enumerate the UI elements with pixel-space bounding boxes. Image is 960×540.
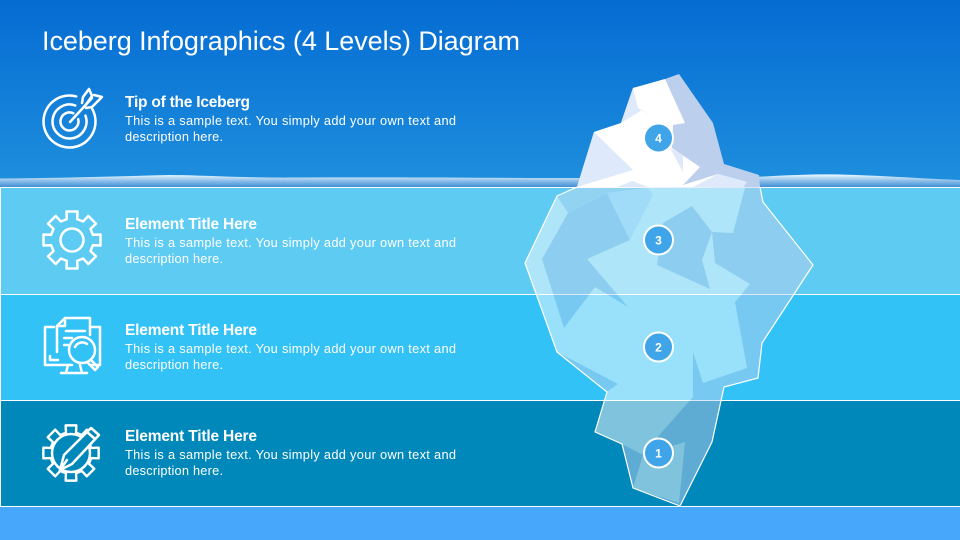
band: level 3 xyxy=(0,188,960,294)
iceberg underwater body xyxy=(525,187,813,506)
text: level 2: This is a sample text. You simply add your own text and xyxy=(125,341,456,356)
number badge 4 xyxy=(644,124,673,152)
icon: target with arrow xyxy=(43,89,102,148)
text: tip of the iceberg: This is a sample text. You simply add your own text and xyxy=(125,113,456,128)
band: level 2 xyxy=(0,294,960,400)
sky background xyxy=(0,0,960,188)
icon: monitor with document and magnifier xyxy=(45,318,100,373)
number badge 2: 2 xyxy=(655,340,662,354)
iceberg tip xyxy=(577,74,760,187)
text: level 1: Element Title Here xyxy=(125,428,257,445)
text: tip of the iceberg: Tip of the Iceberg xyxy=(125,94,250,111)
iceberg diagram xyxy=(525,74,813,506)
text: level 2: Element Title Here xyxy=(125,322,257,339)
text: level 1 xyxy=(125,428,456,478)
number badge 4: 4 xyxy=(655,132,662,146)
title: Iceberg Infographics (4 Levels) Diagram xyxy=(42,26,520,56)
icon: gear with pencil xyxy=(43,425,99,481)
bottom strip xyxy=(0,506,960,540)
number badge 2 xyxy=(644,332,673,362)
icon: gear xyxy=(44,212,100,268)
text: level 1: description here. xyxy=(125,463,223,478)
text: tip of the iceberg xyxy=(125,94,456,144)
text: tip of the iceberg: description here. xyxy=(125,129,223,144)
text: level 3 xyxy=(125,216,456,266)
number badge 1: 1 xyxy=(655,446,662,460)
text: level 3: This is a sample text. You simply add your own text and xyxy=(125,235,456,250)
text: level 2: description here. xyxy=(125,357,223,372)
number badge 1 xyxy=(644,438,673,468)
text: level 3: Element Title Here xyxy=(125,216,257,233)
text: level 2 xyxy=(125,322,456,372)
number badge 3: 3 xyxy=(655,234,662,248)
water surface line xyxy=(0,174,960,187)
text: level 3: description here. xyxy=(125,251,223,266)
iceberg outline xyxy=(525,187,813,506)
number badge 3 xyxy=(644,226,673,254)
text: level 1: This is a sample text. You simply add your own text and xyxy=(125,447,456,462)
band: level 1 xyxy=(0,400,960,506)
